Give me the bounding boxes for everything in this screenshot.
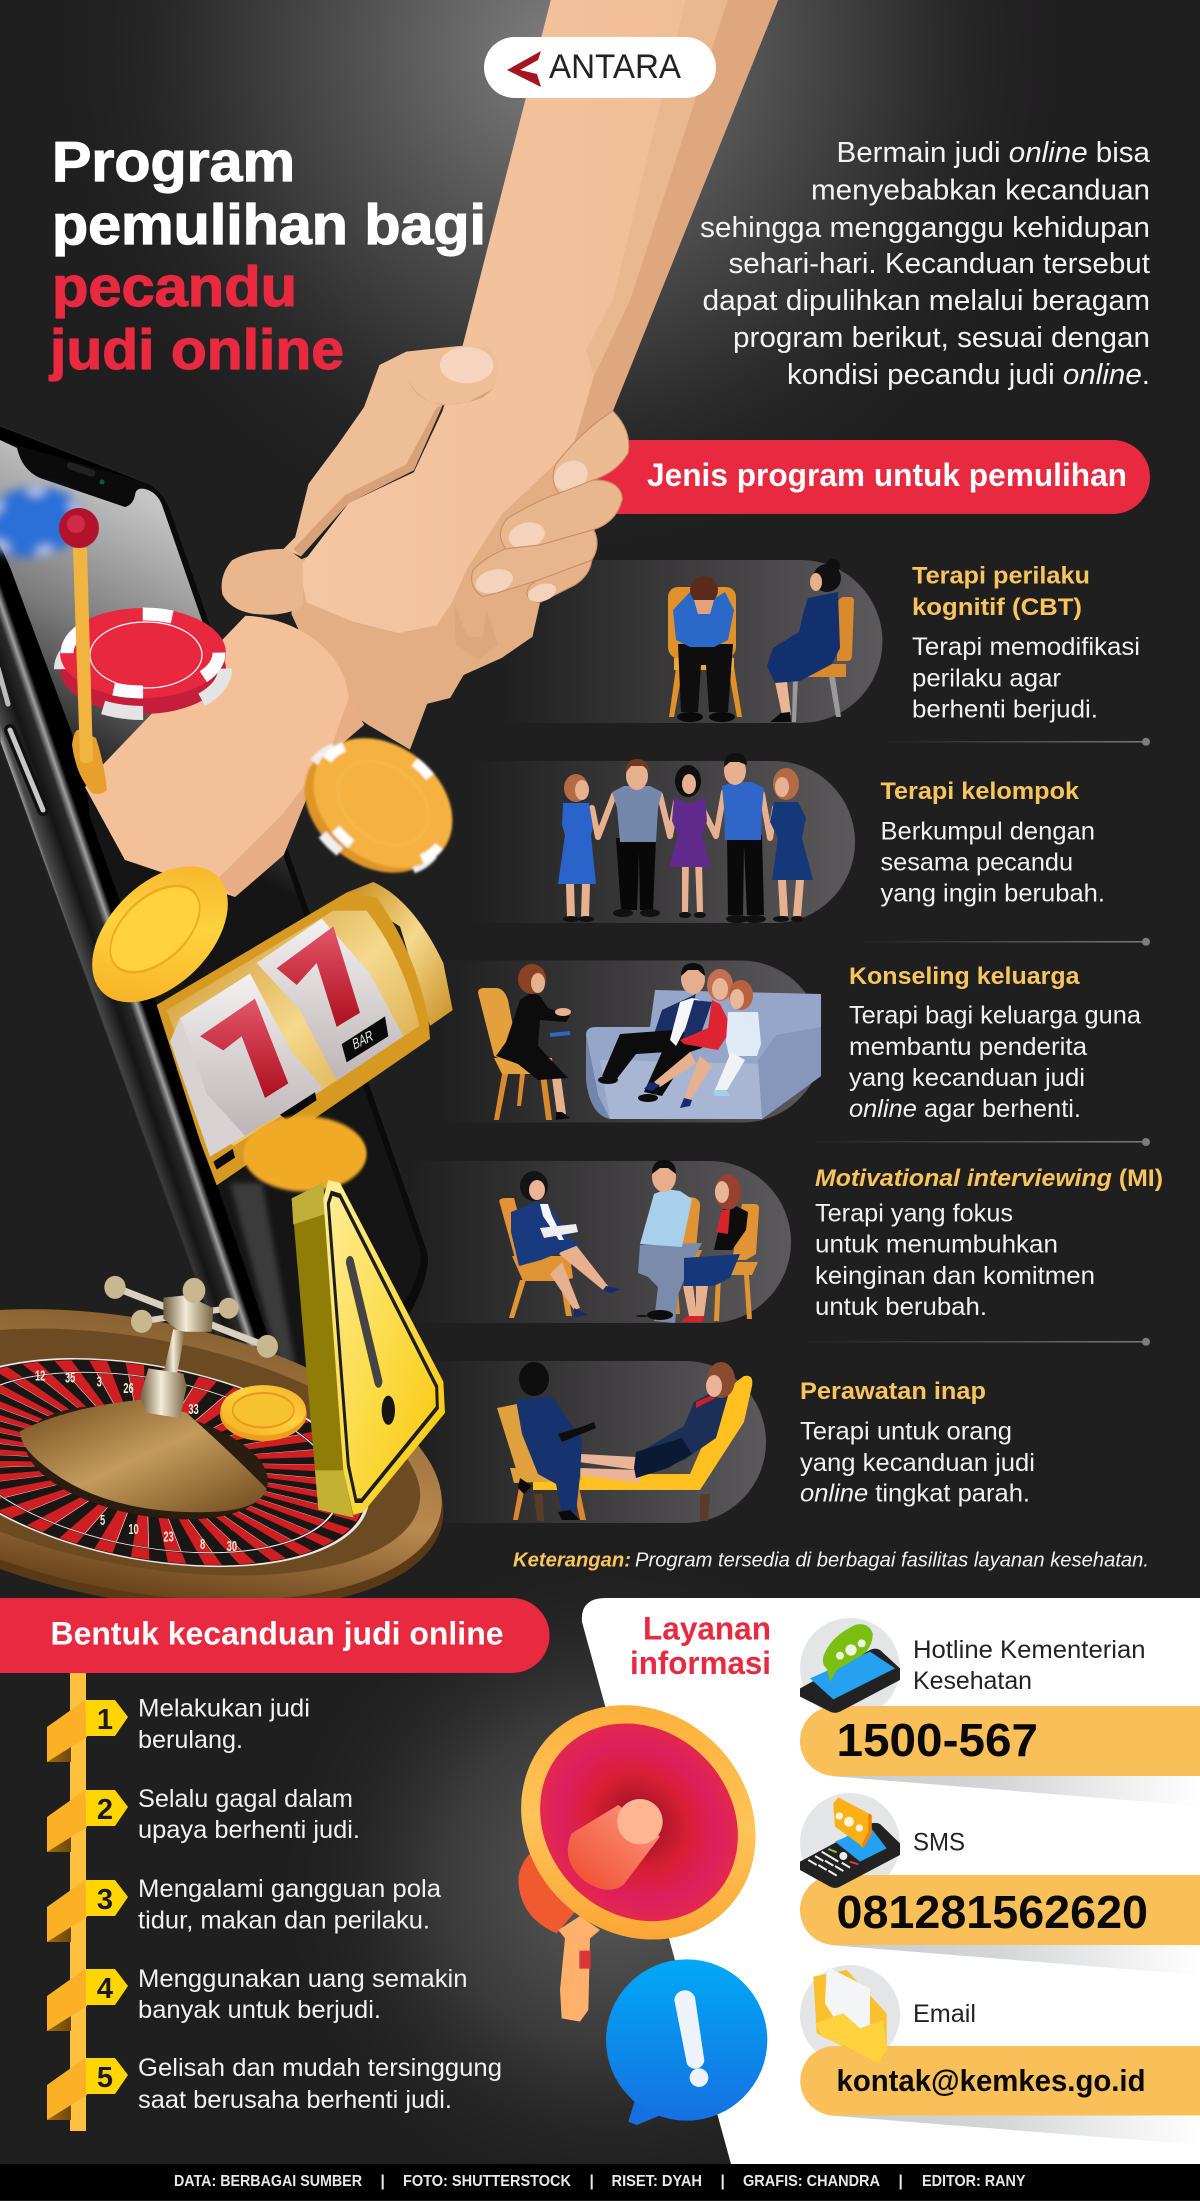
title: pemulihan bagi (52, 193, 486, 257)
section banner: bentuk kecanduan: Bentuk kecanduan judi online (50, 1616, 504, 1652)
step text 5: saat berusaha berhenti judi. (138, 2086, 452, 2114)
section banner: bentuk kecanduan (0, 1598, 550, 1673)
footer credits: | (898, 2173, 903, 2190)
step text 1: Melakukan judi (138, 1694, 310, 1722)
title: motivational interviewing: Motivational interviewing (MI) (815, 1165, 1163, 1192)
step text 3: tidur, makan dan perilaku. (138, 1906, 430, 1934)
ribbon tag 3: 3 (97, 1884, 113, 1916)
illustration: megaphone (473, 1657, 804, 2022)
title: judi online (49, 318, 344, 382)
item 2: terapi kelompok (470, 753, 1105, 923)
label: hotline: Kesehatan (913, 1667, 1032, 1695)
item 3: konseling keluarga (440, 960, 1141, 1123)
item 5: perawatan inap (420, 1361, 1035, 1523)
step text 2: Selalu gagal dalam (138, 1785, 353, 1813)
intro paragraph: menyebabkan kecanduan (811, 174, 1150, 206)
title: terapi perilaku kognitif: Terapi perilaku (912, 562, 1090, 590)
title: pecandu (52, 255, 297, 319)
lower arm (85, 616, 364, 897)
title: perawatan inap: Perawatan inap (800, 1378, 986, 1405)
label: hotline: Hotline Kementerian (913, 1636, 1146, 1664)
gold coin on wheel (220, 1385, 307, 1441)
slot machine (157, 882, 453, 1185)
roulette turret (104, 1276, 278, 1418)
section banner: jenis program (560, 440, 1150, 514)
footer credits: FOTO: SHUTTERSTOCK (403, 2173, 572, 2190)
panel: layanan informasi (582, 1598, 1200, 2164)
illustration: counselling pair (500, 559, 882, 723)
roulette numbers: 8 (200, 1536, 205, 1552)
BAR tag (342, 1016, 388, 1062)
footer credits: | (590, 2173, 594, 2190)
description: motivational interviewing: keinginan dan komitmen (815, 1262, 1095, 1290)
description: konseling keluarga: yang kecanduan judi (849, 1064, 1085, 1092)
description: terapi perilaku kognitif: Terapi memodifikasi (912, 633, 1140, 661)
roulette cone (20, 1400, 267, 1512)
number: sms: 081281562620 (836, 1886, 1148, 1938)
heading: layanan informasi: informasi (630, 1645, 771, 1681)
ribbon tag 5: 5 (97, 2062, 113, 2094)
roulette rings (0, 1328, 376, 1597)
step text 2 (138, 1785, 360, 1844)
step text 1 (138, 1694, 310, 1754)
step 3 (47, 1875, 441, 1942)
icon: envelope (813, 1967, 887, 2063)
roulette numbers: 33 (188, 1401, 199, 1417)
item 1: terapi perilaku kognitif (500, 559, 1140, 724)
address: email: kontak@kemkes.go.id (836, 2063, 1146, 2098)
illustration: roulette wheel (0, 1180, 452, 1652)
roulette numbers: 23 (163, 1528, 174, 1545)
label: email: Email (913, 2000, 976, 2028)
ribbon tag 4 (47, 1969, 128, 2031)
icon: blue alert bubble (606, 1959, 767, 2125)
hand base filler (291, 445, 594, 750)
intro paragraph: dapat dipulihkan melalui beragam (702, 285, 1150, 317)
step text 5: Gelisah dan mudah tersinggung (138, 2054, 502, 2082)
contact: sms (800, 1793, 1200, 1975)
step 4 (47, 1965, 468, 2031)
step text 4: banyak untuk berjudi. (138, 1996, 381, 2024)
ribbon tag 2: 2 (97, 1794, 113, 1826)
roulette numbers: 12 (35, 1367, 46, 1384)
gold coin top (80, 839, 240, 1030)
icon: red casino chip (60, 608, 226, 714)
description: konseling keluarga: membantu penderita (849, 1033, 1087, 1061)
roulette numbers: 26 (123, 1380, 134, 1397)
section banner: jenis program: Jenis program untuk pemulihan (647, 457, 1127, 493)
description: motivational interviewing: Terapi yang fokus (815, 1200, 1013, 1228)
step 5 (47, 2054, 502, 2120)
description: motivational interviewing: untuk menumbuhkan (815, 1230, 1058, 1258)
panel: jenis program (410, 440, 1163, 1572)
thumb (222, 549, 303, 615)
description: perawatan inap (800, 1418, 1035, 1508)
description: terapi perilaku kognitif: perilaku agar (912, 664, 1061, 692)
roulette numbers: 10 (128, 1521, 139, 1538)
contact: email (800, 1965, 1200, 2145)
step text 3 (138, 1875, 441, 1934)
illustration: smartphone (0, 422, 428, 1420)
label: sms: SMS (913, 1828, 965, 1856)
warning sign (292, 1180, 445, 1517)
note: keterangan: Program tersedia di berbagai fasilitas layanan kesehatan. (635, 1550, 1149, 1572)
step text 3: Mengalami gangguan pola (138, 1875, 441, 1903)
description: terapi perilaku kognitif (912, 633, 1140, 724)
icon: antara mark (507, 51, 541, 87)
description: terapi kelompok: yang ingin berubah. (880, 880, 1105, 908)
description: konseling keluarga: online agar berhenti. (849, 1095, 1081, 1123)
illustration: handshake arms (85, 0, 778, 897)
intro paragraph: sehingga mengganggu kehidupan (700, 212, 1150, 244)
intro paragraph: program berikut, sesuai dengan (733, 322, 1150, 354)
step text 4: Menggunakan uang semakin (138, 1965, 468, 1993)
illustration: casino objects (80, 839, 453, 1192)
icon: phone with green bubble (800, 1624, 900, 1713)
ribbon spine (70, 1673, 86, 2131)
illustration: family counselling (440, 960, 821, 1123)
intro paragraph: Bermain judi online bisa (836, 137, 1151, 169)
label: hotline (913, 1636, 1146, 1695)
title: terapi kelompok: Terapi kelompok (880, 778, 1080, 805)
ribbon tag 1 (47, 1700, 128, 1762)
description: perawatan inap: online tingkat parah. (800, 1480, 1030, 1508)
roulette numbers: 5 (100, 1512, 105, 1528)
roulette numbers: 30 (227, 1538, 237, 1554)
title: konseling keluarga: Konseling keluarga (849, 963, 1080, 990)
panel: bentuk kecanduan (0, 1598, 550, 2131)
step text 5 (138, 2054, 502, 2114)
icon: slot lever (59, 508, 107, 794)
roulette numbers (35, 1367, 237, 1554)
description: motivational interviewing: untuk berubah. (815, 1293, 987, 1321)
roulette numbers: 35 (65, 1369, 76, 1386)
ribbon tag 3 (47, 1880, 128, 1942)
upper arm and palm (299, 0, 778, 633)
intro paragraph: kondisi pecandu judi online. (787, 359, 1150, 391)
contact: hotline (800, 1618, 1200, 1806)
step text 2: upaya berhenti judi. (138, 1816, 360, 1844)
footer credits: RISET: DYAH (612, 2173, 702, 2190)
step 2 (47, 1785, 360, 1852)
footer credits: GRAFIS: CHANDRA (743, 2173, 880, 2190)
footer credits: DATA: BERBAGAI SUMBER (174, 2173, 362, 2190)
description: terapi perilaku kognitif: berhenti berjudi. (912, 696, 1098, 724)
description: konseling keluarga (849, 1002, 1141, 1123)
title: terapi perilaku kognitif (912, 562, 1090, 621)
ribbon tag 1: 1 (97, 1704, 113, 1736)
icon: keypad phone with orange bubble (800, 1797, 900, 1888)
step text 4 (138, 1965, 468, 2024)
step 1 (47, 1694, 310, 1762)
description: terapi kelompok: Berkumpul dengan (880, 818, 1095, 846)
illustration: interview session (410, 1160, 791, 1323)
step text 1: berulang. (138, 1726, 243, 1754)
footer credits: EDITOR: RANY (922, 2173, 1026, 2190)
BAR tag: BAR (351, 1026, 374, 1053)
ribbon tag 2 (47, 1790, 128, 1852)
item 4: motivational interviewing (410, 1160, 1163, 1323)
description: perawatan inap: yang kecanduan judi (800, 1449, 1035, 1477)
title: Program (52, 130, 295, 194)
footer credits (0, 2164, 1200, 2200)
blurred gold coin (243, 1116, 367, 1192)
logo: antara: ANTARA (549, 48, 681, 86)
heading: layanan informasi (630, 1610, 771, 1681)
number: hotline: 1500-567 (836, 1714, 1038, 1766)
footer credits: | (380, 2173, 385, 2190)
ribbon tag 4: 4 (97, 1973, 113, 2005)
icon: blurred blue chip (0, 480, 87, 564)
intro paragraph: sehari-hari. Kecanduan tersebut (728, 248, 1150, 280)
description: motivational interviewing (815, 1200, 1095, 1321)
heading: layanan informasi: Layanan (643, 1610, 771, 1646)
gripping hand back (284, 346, 499, 556)
title (49, 130, 486, 382)
roulette numbers: 3 (97, 1374, 102, 1390)
palm shading (454, 602, 498, 660)
intro paragraph (700, 137, 1151, 391)
fingers (553, 411, 629, 493)
illustration: inpatient care (420, 1361, 766, 1523)
description: perawatan inap: Terapi untuk orang (800, 1418, 1012, 1446)
note: keterangan: Keterangan: (513, 1550, 631, 1572)
ribbon tag 5 (47, 2058, 128, 2120)
footer credits: | (720, 2173, 725, 2190)
description: terapi kelompok (880, 818, 1105, 908)
description: terapi kelompok: sesama pecandu (880, 848, 1073, 876)
description: konseling keluarga: Terapi bagi keluarga guna (849, 1002, 1141, 1030)
logo: antara (484, 37, 716, 98)
title: terapi perilaku kognitif: kognitif (CBT) (912, 594, 1082, 621)
illustration: support group (470, 753, 855, 923)
icon: golden chip blurred (279, 709, 478, 902)
